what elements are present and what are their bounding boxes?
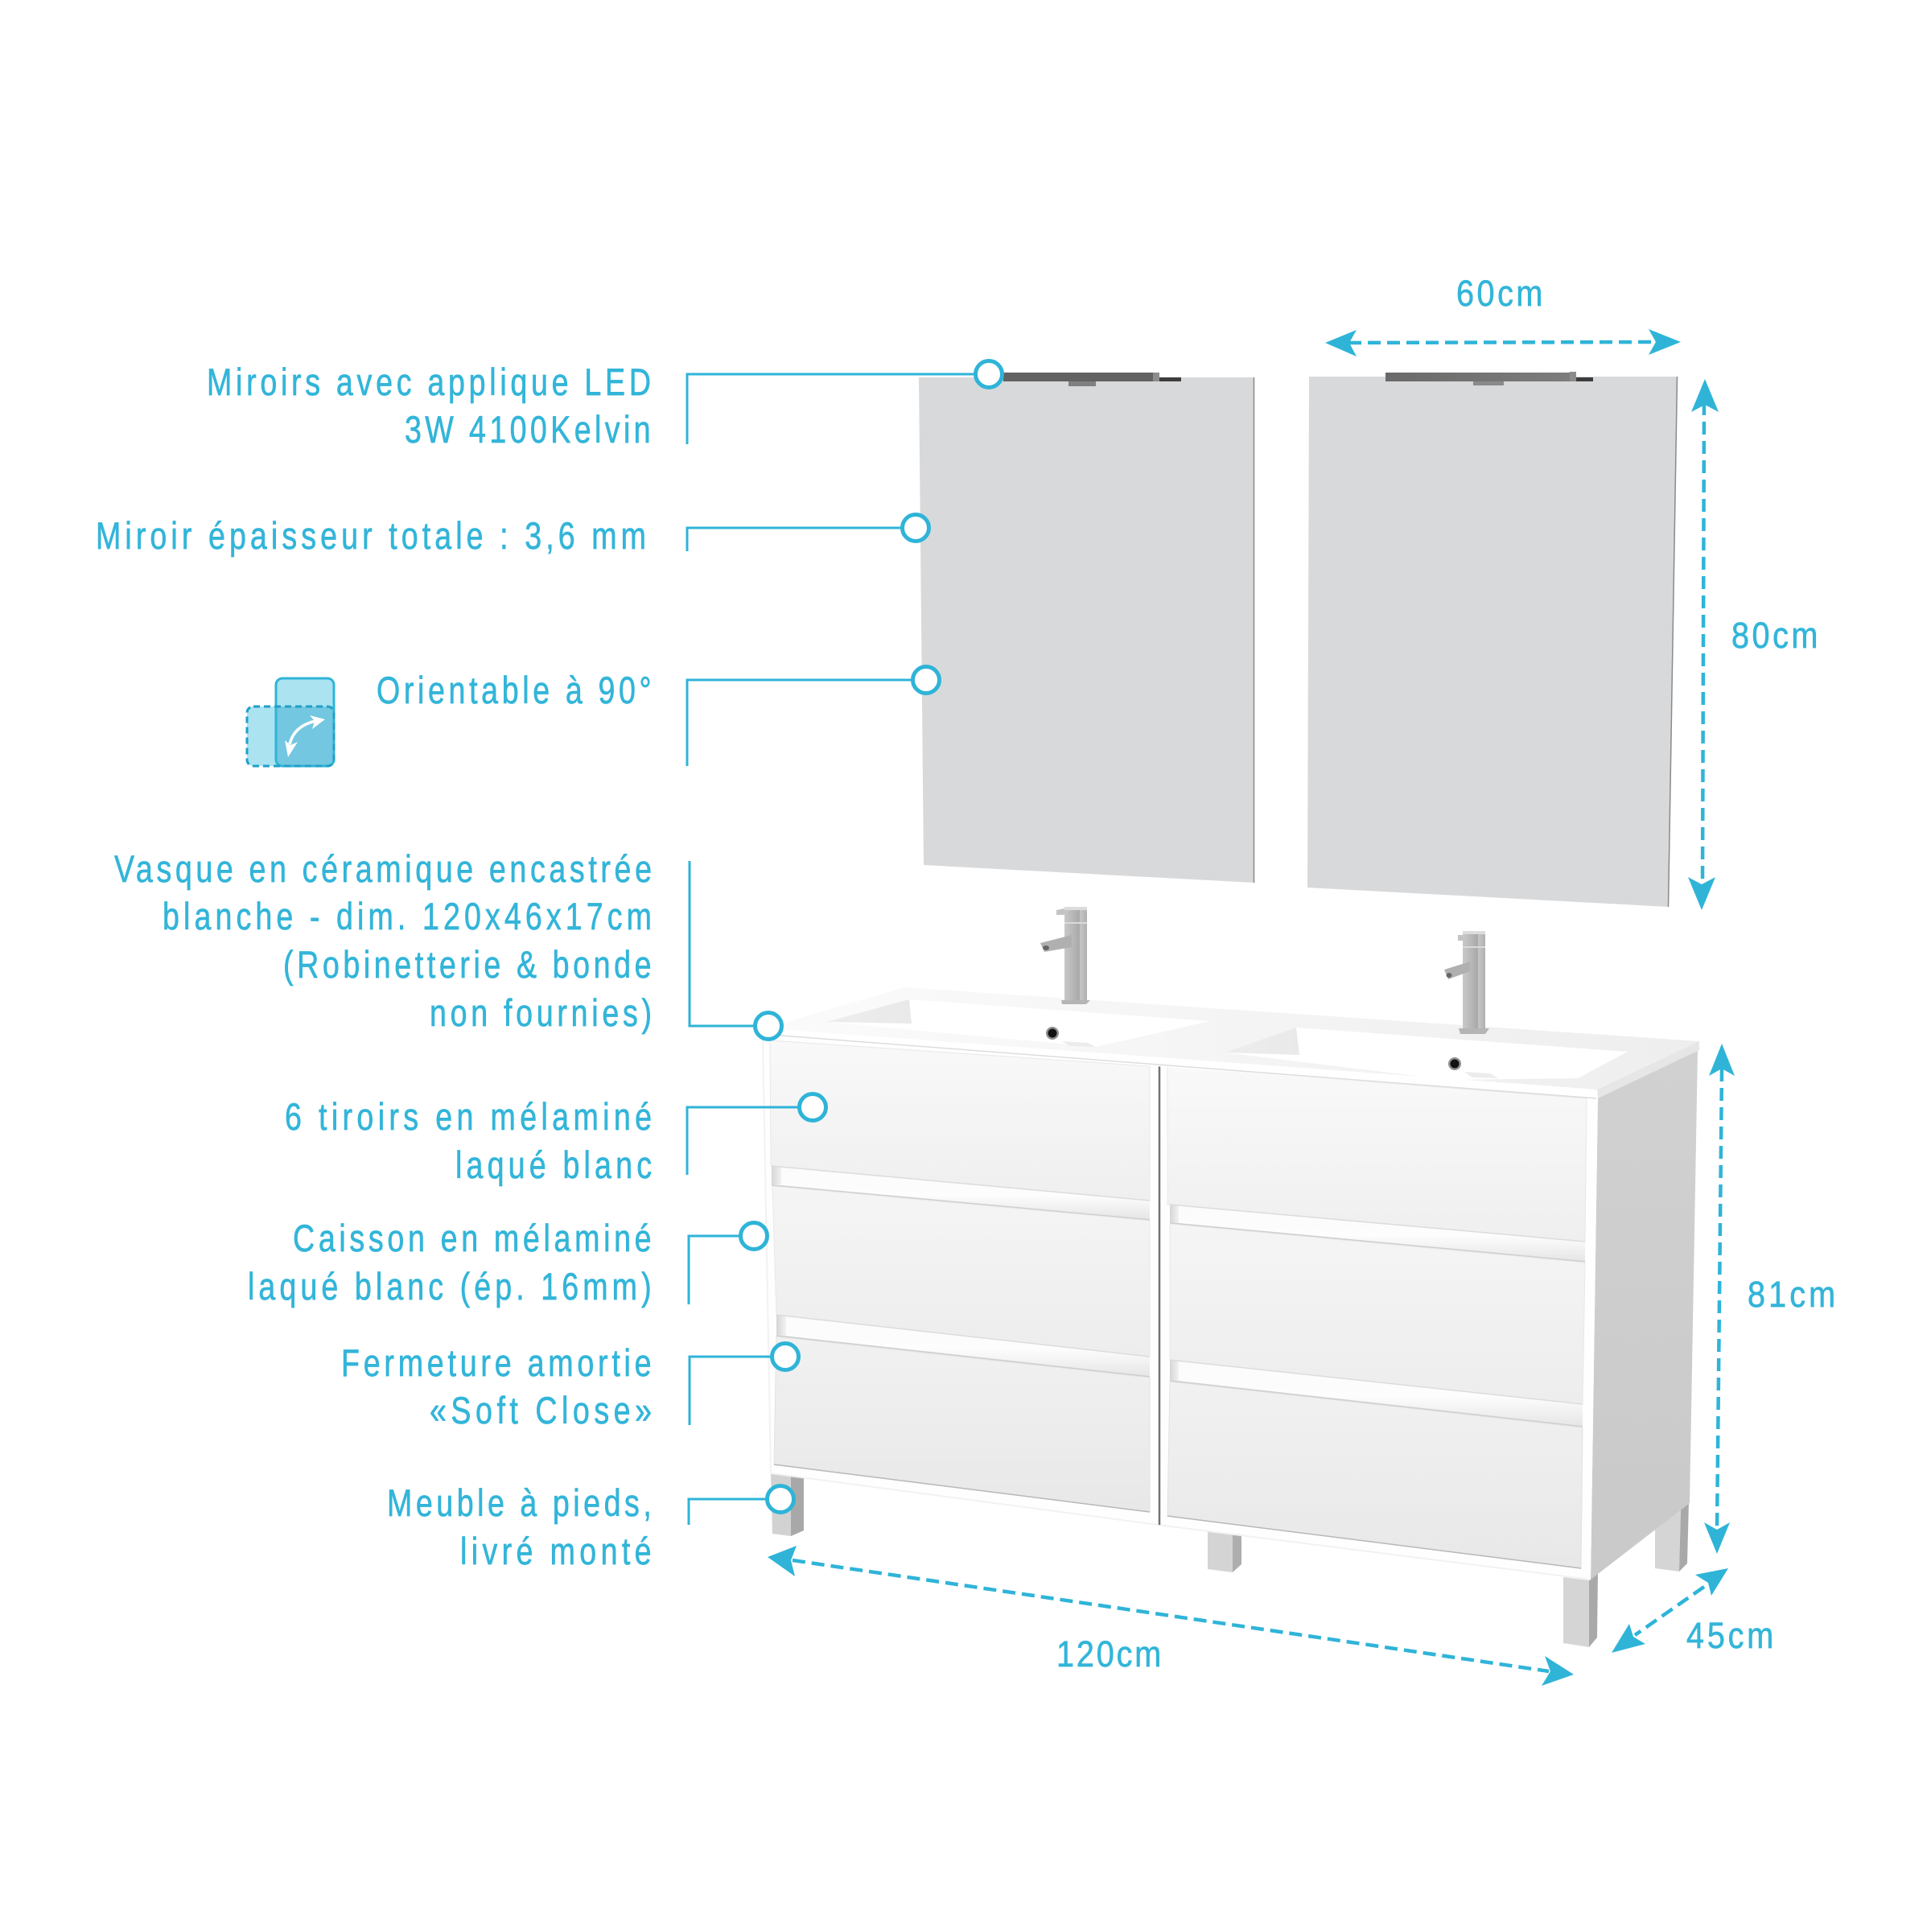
callout: vasque: blanche - dim. 120x46x17cm [163, 896, 652, 938]
drawer left 1 [770, 1040, 1150, 1201]
drawer handle right 2 [1170, 1360, 1583, 1427]
callout: caisson: Caisson en mélaminé [293, 1217, 652, 1260]
callout: vasque: (Robinetterie & bonde [283, 944, 652, 987]
dimension arrow: 81cm [1704, 1044, 1835, 1554]
basin right [1225, 1028, 1628, 1080]
basin left [826, 999, 1210, 1047]
drawer handle right 1 [1170, 1205, 1585, 1262]
label 80cm: 80cm [1731, 616, 1818, 656]
callout: pieds: livré monté [460, 1530, 652, 1573]
label 60cm: 60cm [1456, 274, 1542, 314]
dimension arrow: 120cm [768, 1546, 1574, 1686]
callout: caisson [248, 1217, 768, 1308]
drawer handle left 2 [776, 1315, 1150, 1377]
callout: epaisseur miroir [96, 515, 928, 558]
callout: tiroirs: 6 tiroirs en mélaminé [285, 1096, 652, 1139]
LED light left [1003, 373, 1181, 386]
LED light right [1385, 372, 1593, 385]
callout: fermeture: Fermeture amortie [341, 1342, 652, 1385]
leg back right [1655, 1502, 1689, 1572]
callout: miroirs LED: 3W 4100Kelvin [405, 409, 651, 451]
callout: caisson: laqué blanc (ép. 16mm) [248, 1266, 652, 1308]
center divider [1159, 1065, 1160, 1525]
callout: miroirs LED [207, 360, 1003, 451]
drain right [1448, 1057, 1498, 1078]
icon: orientable mirror [247, 678, 334, 766]
callout: orientable [377, 666, 940, 766]
label 45cm: 45cm [1686, 1616, 1773, 1656]
callout: fermeture [341, 1342, 798, 1432]
callout: epaisseur miroir: Miroir épaisseur totale : 3,6 mm [96, 515, 646, 558]
leg front right [1563, 1573, 1598, 1647]
leg back left [771, 1473, 804, 1536]
callout: tiroirs: laqué blanc [455, 1144, 652, 1187]
mirror left [919, 373, 1254, 883]
callout: vasque: Vasque en céramique encastrée [114, 848, 652, 891]
vanity cabinet [762, 907, 1699, 1647]
countertop [764, 987, 1699, 1098]
callout: fermeture: «Soft Close» [430, 1390, 652, 1432]
mirror right [1307, 372, 1678, 907]
callout: pieds: Meuble à pieds, [387, 1482, 652, 1525]
dimension arrow: 45cm [1612, 1568, 1773, 1656]
cabinet front frame [762, 1034, 1598, 1580]
drawer left 3 [774, 1337, 1150, 1512]
leg middle [1208, 1530, 1241, 1572]
faucet left [1040, 907, 1090, 1004]
drawer right 3 [1167, 1382, 1583, 1568]
drain left [1046, 1027, 1096, 1047]
label 120cm: 120cm [1056, 1634, 1161, 1675]
callout: vasque [114, 848, 782, 1040]
callout: vasque: non fournies) [430, 992, 652, 1035]
drawer right 1 [1167, 1066, 1587, 1242]
faucet right [1444, 931, 1489, 1034]
callout: tiroirs [285, 1094, 826, 1187]
callout: pieds [387, 1482, 793, 1573]
drawer handle left 1 [772, 1166, 1150, 1220]
dimension arrow: 60cm [1325, 274, 1681, 356]
label 81cm: 81cm [1748, 1275, 1835, 1315]
callout: orientable: Orientable à 90° [377, 669, 652, 712]
callout: miroirs LED: Miroirs avec applique LED [207, 361, 651, 404]
cabinet side [1591, 1051, 1698, 1580]
drawer left 2 [772, 1186, 1150, 1357]
dimension arrow: 80cm [1688, 379, 1818, 910]
drawer right 2 [1170, 1224, 1585, 1404]
